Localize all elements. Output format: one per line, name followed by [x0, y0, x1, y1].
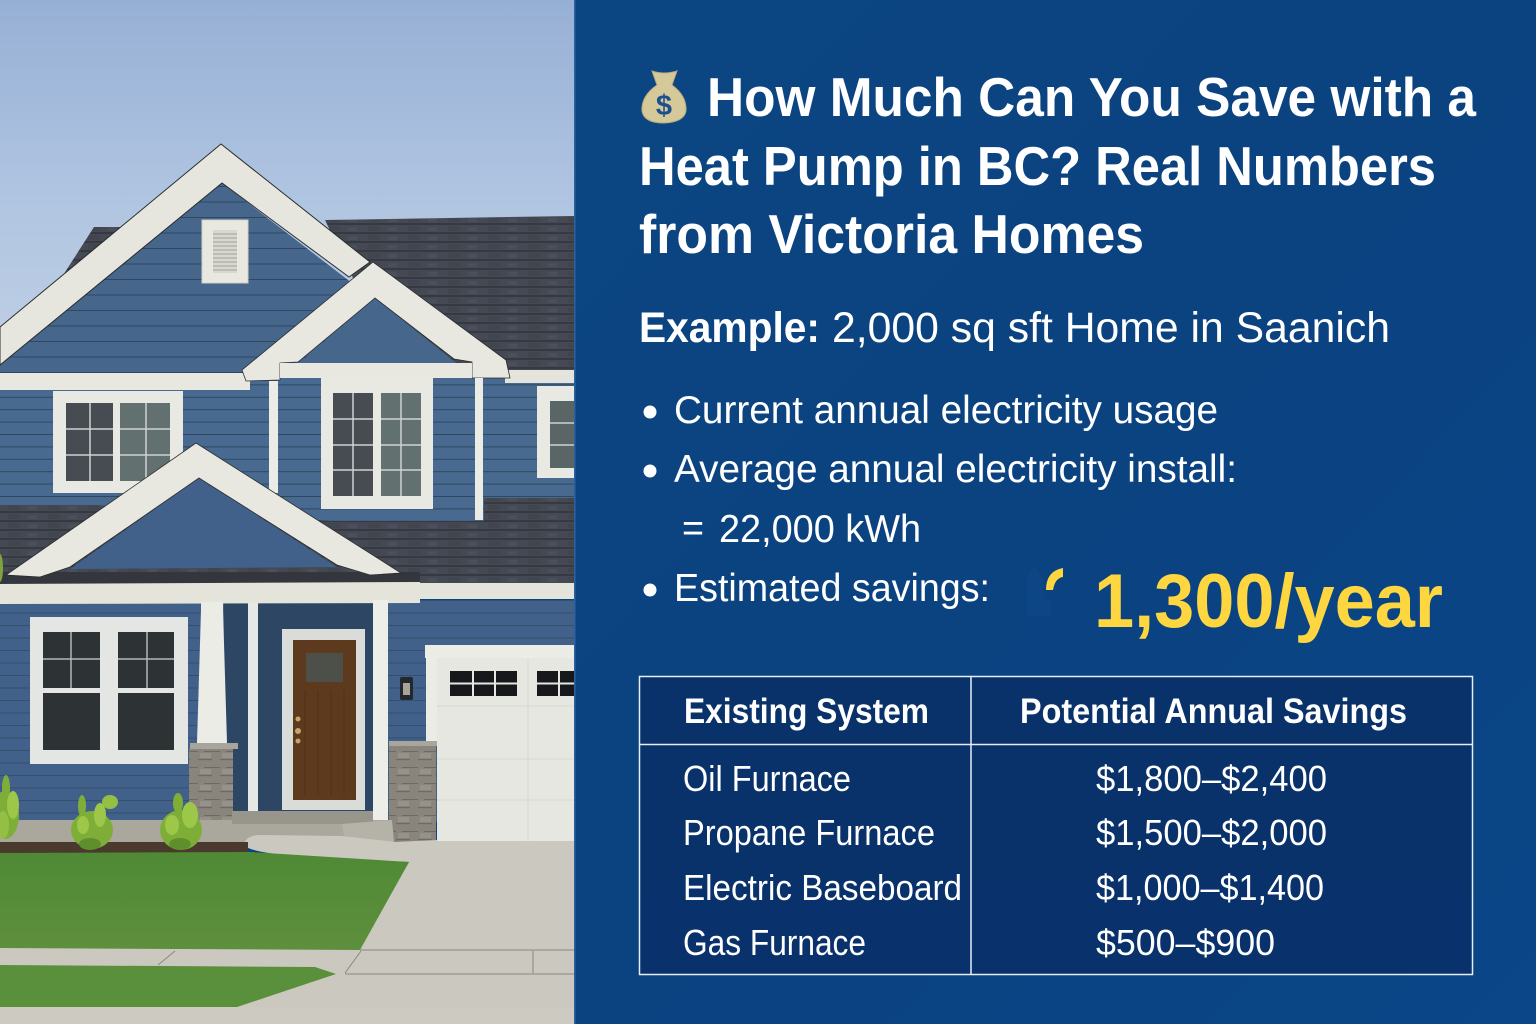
table header: Existing System — [684, 692, 929, 731]
table row values — [1096, 758, 1327, 963]
stone base right — [389, 741, 437, 843]
bottom sidewalk — [0, 1007, 574, 1024]
table row labels — [683, 758, 962, 963]
table: savings by system — [639, 676, 1472, 975]
bullet list — [644, 389, 1237, 610]
porch post — [248, 603, 258, 811]
window: upper right — [537, 386, 577, 478]
shrub right — [160, 793, 202, 850]
table header — [684, 692, 1407, 731]
left horizontal band — [0, 373, 250, 390]
fascia — [0, 582, 574, 604]
table header: Potential Annual Savings — [1020, 692, 1407, 731]
window: lower left — [30, 617, 188, 764]
garage frame — [425, 645, 574, 741]
foundation and step — [0, 811, 394, 842]
shrub tip at roofline — [0, 554, 3, 582]
lower sidewalk joints — [158, 950, 574, 974]
front lawn — [0, 852, 409, 950]
cross gable band — [280, 363, 472, 378]
icon: faint ghost mark — [1026, 566, 1050, 616]
lower gable siding — [70, 478, 337, 569]
column stone base — [189, 743, 238, 820]
icon: money bag: $ — [656, 90, 672, 122]
front door — [282, 629, 365, 810]
lower gable trim — [6, 443, 401, 577]
first floor upper wall siding — [0, 376, 574, 523]
lower roof — [0, 498, 574, 584]
porch column — [197, 602, 227, 743]
shrub centre — [71, 795, 118, 850]
table row values: $1,500–$2,000 — [1096, 812, 1327, 853]
lower lawn — [0, 965, 336, 1007]
upper roof — [60, 216, 574, 375]
wall lamp — [400, 677, 413, 700]
icon: yellow currency fragment — [1046, 568, 1063, 590]
panel: savings information — [574, 0, 1536, 1024]
title — [639, 66, 1476, 265]
right horizontal band — [505, 370, 574, 383]
roof shadow band — [0, 572, 420, 583]
panel edge — [574, 0, 576, 1024]
downspouts — [269, 378, 483, 520]
main gable trim — [0, 144, 370, 365]
bullet list: Estimated savings: — [674, 567, 990, 610]
table row labels: Propane Furnace — [683, 812, 935, 853]
table row labels: Gas Furnace — [683, 922, 866, 963]
bullet list: Average annual electricity install: — [674, 448, 1237, 491]
title: How Much Can You Save with a — [707, 66, 1476, 128]
bullet list: Current annual electricity usage — [674, 389, 1218, 432]
sky — [0, 0, 574, 326]
bullet list: 22,000 kWh — [719, 508, 921, 551]
window: upper left — [53, 391, 183, 493]
panel: house photo — [0, 0, 577, 1024]
bullet list: = — [682, 507, 704, 550]
subheading: example: 2,000 sq sft Home in Saanich — [832, 304, 1390, 352]
table row values: $500–$900 — [1096, 922, 1275, 963]
cross gable trim — [242, 262, 510, 381]
right porch column — [373, 600, 388, 822]
cross gable siding — [306, 298, 456, 363]
mulch bed — [0, 842, 248, 853]
shrub left — [0, 775, 19, 839]
table row values: $1,800–$2,400 — [1096, 758, 1327, 799]
garage door — [437, 658, 574, 841]
savings amount: 1,300/year — [1094, 559, 1443, 644]
icon: money bag — [642, 71, 686, 123]
porch recess — [224, 603, 374, 811]
driveway and walkway — [0, 835, 574, 1024]
main gable siding — [0, 184, 364, 373]
title: Heat Pump in BC? Real Numbers — [639, 135, 1436, 197]
lower wall siding — [0, 600, 574, 822]
table row labels: Electric Baseboard — [683, 867, 962, 908]
table row values: $1,000–$1,400 — [1096, 867, 1324, 908]
table row labels: Oil Furnace — [683, 758, 851, 799]
title: from Victoria Homes — [639, 203, 1144, 265]
window: upper centre — [321, 377, 433, 509]
subheading: example: Example: — [639, 304, 820, 352]
gable vent — [202, 220, 248, 283]
